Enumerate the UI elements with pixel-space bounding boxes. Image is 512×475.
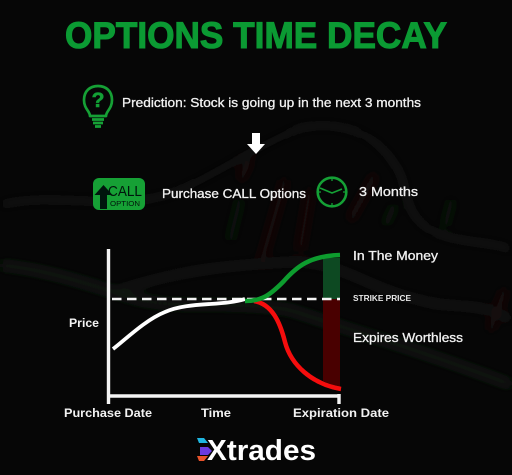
expires worthless label: Expires Worthless xyxy=(353,330,463,345)
call options text: Purchase CALL Options xyxy=(162,186,306,201)
strike price dashed line xyxy=(112,298,340,300)
arrow: down xyxy=(247,133,265,154)
in the money label: In The Money xyxy=(353,248,438,263)
green profit curve xyxy=(245,255,340,301)
icon: call option badge: OPTION xyxy=(110,199,140,208)
shaded loss band xyxy=(323,299,340,388)
strike price label: STRIKE PRICE xyxy=(353,293,411,303)
expiration date label: Expiration Date xyxy=(293,406,389,420)
logo: Xtrades: Xtrades xyxy=(207,435,316,467)
prediction text: Prediction: Stock is going up in the next 3 months xyxy=(122,95,421,110)
title: OPTIONS TIME DECAY xyxy=(65,14,447,56)
icon: clock xyxy=(317,177,347,207)
icon: call option badge xyxy=(93,178,145,210)
background: blurred stock chart xyxy=(0,126,512,385)
red loss curve xyxy=(254,301,341,389)
time label: Time xyxy=(201,406,231,420)
icon: question lightbulb: ? xyxy=(92,89,104,112)
price axis label: Price xyxy=(69,316,99,330)
chart xyxy=(108,249,341,404)
purchase date label: Purchase Date xyxy=(64,406,152,420)
axes xyxy=(108,249,339,404)
icon: question lightbulb xyxy=(84,86,112,126)
shaded gain band xyxy=(323,258,340,299)
icon: call option badge: CALL xyxy=(108,183,142,200)
white price curve xyxy=(113,299,245,349)
duration text: 3 Months xyxy=(359,184,418,199)
